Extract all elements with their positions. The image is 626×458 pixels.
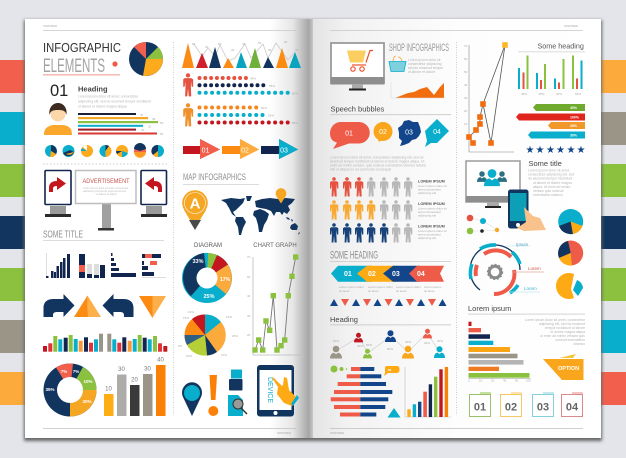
dot rows group 1: 45% (250, 76, 256, 80)
people labels: amet consectetur (418, 188, 441, 192)
line chart with orange markers: 50 (464, 70, 468, 74)
heading: speech bubbles (330, 104, 451, 115)
bars with percentages: 35 (140, 113, 144, 117)
multicolor bar row (43, 334, 167, 352)
text block (528, 168, 574, 197)
shop text block: Lorem ipsum dolor sit (408, 58, 440, 62)
heading: heading: Heading (330, 315, 358, 324)
stars: ★ (546, 145, 555, 156)
icon: navy curved arrow right (44, 294, 74, 317)
section 01 heading: ut labore et dolore magna aliqua (78, 104, 127, 108)
people labels: adipiscing elit (418, 214, 436, 218)
line chart with green markers: 20 (247, 333, 251, 337)
triangle peak chart: 40 (295, 48, 299, 52)
text block: Lorem ipsum dolor sit amet, (528, 168, 570, 172)
people labels: amet consectetur (418, 210, 441, 214)
arrow 01: 01 (202, 148, 209, 154)
text block: veniam quis nostrud (533, 189, 563, 193)
text block right aligned (525, 318, 586, 346)
pie chart: 5% (178, 344, 183, 348)
kiosk right (141, 170, 167, 217)
pie chart: 10% (188, 310, 194, 314)
donut chart: diagram: 17% (220, 277, 231, 283)
icon: navy curved arrow left (102, 294, 134, 317)
people network line chart: 30% (437, 339, 443, 343)
bubble 03: 03 (405, 130, 413, 136)
grouped bars: 30% (556, 92, 562, 96)
phone with hand (508, 190, 546, 231)
ring labels: Ipsum (516, 242, 529, 247)
pie chart: 15% (226, 315, 232, 319)
number box 02: 02 (505, 402, 517, 414)
line chart with orange markers: 30 (464, 96, 468, 100)
pie: teal (558, 209, 583, 234)
chevron captions: sit amet (424, 289, 435, 293)
people labels: LOREM IPSUM (418, 224, 445, 228)
heading: speech bubbles: Speech bubbles (330, 104, 385, 114)
ring diagram with gear (470, 245, 544, 294)
dot rows group 1: 55% (269, 84, 275, 88)
people labels: adipiscing elit (418, 191, 436, 195)
donut chart with percentages: 10% (83, 379, 93, 384)
dot rows group 2: 50% (261, 106, 267, 110)
horizontal bar chart: 0 (468, 378, 470, 382)
horizontal bar chart: 10 (479, 378, 483, 382)
people network line chart (330, 329, 445, 358)
icon: orange map pin on map (276, 188, 286, 204)
arrow bars: 30% (570, 134, 578, 138)
bubble 04: 04 (433, 129, 441, 136)
arrow 01 (183, 139, 220, 159)
people network line chart: 50% (366, 343, 372, 347)
text block: ut labore et dolore magna (533, 181, 572, 185)
donut chart with percentages: 30% (82, 399, 92, 404)
number box 03 (532, 393, 554, 416)
column chart with values: 20 (131, 378, 138, 384)
donut chart with percentages (44, 364, 96, 416)
text block right aligned: tempor incididunt ut labore (545, 326, 585, 330)
line chart with orange markers: 20 (464, 109, 468, 113)
line chart with orange markers: 70 (464, 44, 468, 48)
number box 01: 01 (474, 402, 486, 414)
people network line chart: 60% (333, 339, 339, 343)
line chart with green markers: 70 (247, 255, 251, 259)
bars with percentages: 30 (141, 128, 145, 132)
donut chart with percentages: 7% (61, 369, 67, 374)
chevron captions: sit amet (368, 289, 379, 293)
triangle peak chart: 60 (284, 40, 288, 44)
line chart with orange markers (464, 42, 514, 152)
chevron captions: sit amet (339, 289, 350, 293)
grouped bars (518, 56, 582, 96)
column chart with values: 40 (157, 358, 164, 364)
pie chart: 25% (232, 334, 238, 338)
triangle peak chart (182, 40, 301, 68)
section 01 heading (50, 82, 151, 108)
people row 1 (330, 177, 412, 196)
column chart with values: 30 (118, 367, 125, 373)
heading: lorem ipsum (468, 304, 585, 315)
arrow bars: 20% (570, 124, 578, 128)
section 01 heading: 01 (50, 82, 68, 100)
line chart with orange markers: 10 (464, 122, 468, 126)
billboard: advertisement: adipiscing elit sed do eiusmod tempor (83, 189, 127, 193)
monitor with people (466, 161, 520, 208)
small bar chart 1 (46, 253, 70, 278)
icon: orange inverted triangle (139, 296, 166, 318)
triangle peak chart: 50 (218, 42, 222, 46)
pie chart: 20% (186, 354, 192, 358)
arrow bars (516, 104, 585, 138)
stars: ★ (577, 145, 586, 156)
arrow 03 (261, 139, 298, 159)
icon: document with magnifier (228, 395, 247, 416)
paragraph: enim ad minim veniam, quis nostrud exercitation ullamco laboris (330, 164, 426, 168)
orange tag (384, 366, 400, 376)
billboard: advertisement: ut labore et dolore (96, 192, 117, 196)
heading: some title (43, 228, 164, 241)
option banner (543, 354, 584, 380)
paragraph: nisi ut aliquip ex ea commodo consequat (330, 168, 391, 172)
column chart with values: 10 (105, 386, 112, 392)
header and footer rules: INSPIRED (43, 24, 58, 28)
triangle row (330, 299, 446, 306)
people row 2 (330, 200, 412, 220)
header and footer rules (43, 24, 583, 435)
paragraph: Lorem ipsum dolor sit amet, consectetur adipiscing elit, sed do (330, 156, 424, 160)
chevron captions: sit amet (396, 289, 407, 293)
title: INFOGRAPHIC (43, 41, 121, 55)
people labels (418, 180, 447, 240)
section 01 heading: adipiscing elit, sed do eiusmod tempor incididunt (78, 100, 151, 104)
butterfly bars (331, 367, 392, 416)
donut chart with percentages: 7% (73, 369, 79, 374)
pie: title (129, 42, 163, 76)
dot rows group 2: 55% (268, 114, 274, 118)
header and footer rules: INSPIRED (330, 431, 345, 435)
text block: consectetur adipiscing elit, sed (528, 172, 574, 176)
icon: red figure (183, 73, 193, 96)
icon: tablet with hand (257, 365, 299, 416)
grouped bars: 35% (538, 92, 545, 96)
chevron band: 01 (344, 271, 352, 278)
heading: map infographics: MAP INFOGRAPHICS (183, 172, 246, 183)
heading: lorem ipsum: Lorem ipsum (468, 304, 511, 313)
triangle peak chart: 35 (268, 48, 272, 52)
stars: ★ (526, 145, 535, 156)
heading: heading (330, 315, 451, 325)
area chart (391, 82, 445, 98)
column chart with values: 30 (144, 366, 151, 372)
people network line chart: 30% (405, 340, 411, 344)
icon: tablet with hand: DEVICE (266, 377, 273, 403)
side stripes left (0, 60, 26, 405)
chevron captions: Lorem ipsum (424, 285, 442, 289)
icon: orange triangle (74, 296, 101, 317)
option banner: OPTION (558, 366, 579, 372)
heading: some title: SOME TITLE (43, 228, 83, 240)
dot rows group 2: 85% (292, 121, 298, 125)
text block: aliqua. Ut enim ad minim (533, 185, 570, 189)
people network line chart: 30% (357, 344, 363, 348)
horizontal bar chart: 100 (526, 378, 531, 382)
text block: exercitation ullamco (533, 193, 563, 197)
heading: some heading (518, 42, 585, 52)
pie: coral (558, 240, 583, 266)
row of small pies (45, 143, 164, 158)
shop text block (408, 58, 444, 74)
billboard: advertisement (76, 170, 136, 230)
chevron band (331, 266, 444, 282)
number box 01 (470, 393, 491, 416)
world map (221, 196, 300, 235)
triangle peak chart: 55 (258, 41, 262, 45)
text block right aligned: adipiscing elit, sed do eiusmod (539, 322, 585, 326)
dot rows group 2 (200, 106, 298, 125)
pie chart: 10% (221, 353, 227, 357)
ring labels: Lorem (528, 266, 541, 271)
grouped bars: 45% (521, 92, 527, 96)
header and footer rules: INSPIRED (564, 24, 579, 28)
line chart with orange markers: 60 (464, 57, 468, 61)
triangle peak chart: 30 (231, 48, 235, 52)
chevron captions: Lorem ipsum dolor (396, 285, 421, 289)
text block: do eiusmod tempor incididunt (528, 176, 572, 180)
column chart with values (104, 358, 166, 416)
small bar chart 4 (142, 254, 166, 278)
paragraph (330, 156, 426, 172)
header and footer rules: INSPIRED (277, 431, 292, 435)
billboard: advertisement: ADVERTISEMENT (82, 178, 130, 185)
line chart with green markers: 60 (247, 275, 251, 279)
number box 04 (562, 393, 583, 416)
people labels: Lorem ipsum dolor sit (418, 184, 447, 188)
stars: ★ (536, 145, 545, 156)
people labels: amet consectetur (418, 232, 441, 236)
shop text block: consectetur adipiscing (408, 62, 442, 66)
icon: location pin (182, 382, 202, 416)
chevron captions: Lorem ipsum dolor (368, 285, 393, 289)
heading: some title: Some title (528, 159, 562, 168)
shop text block: ut labore et dolore (408, 70, 435, 74)
ring labels (516, 242, 541, 291)
side stripes right (600, 60, 626, 405)
network diagram (467, 215, 499, 234)
grouped bars: 64% (575, 92, 581, 96)
text block right aligned: Lorem ipsum dolor sit amet, consectetur (525, 318, 586, 322)
bubble 01 (330, 122, 370, 149)
line chart with green markers: 40 (247, 294, 251, 298)
number box 03: 03 (537, 402, 549, 414)
donut chart with percentages: 35% (45, 387, 55, 392)
horizontal bar chart: 40 (503, 378, 507, 382)
teal triangle (388, 408, 400, 418)
rising bar chart (405, 367, 451, 417)
people labels: Lorem ipsum dolor sit (418, 206, 447, 210)
ring labels: Lorem (524, 286, 537, 291)
dots above butterfly bars (330, 366, 347, 372)
people labels: LOREM IPSUM (418, 180, 445, 184)
people labels: LOREM IPSUM (418, 202, 445, 206)
arrow 02 (222, 139, 259, 159)
stars (526, 145, 586, 156)
bubble 02: 02 (379, 129, 387, 136)
kiosk left (45, 170, 71, 217)
heading: chart graph: CHART GRAPH (253, 243, 297, 249)
donut chart: diagram: 25% (203, 294, 215, 300)
bars with percentages (78, 113, 164, 136)
title (43, 41, 121, 77)
line chart with green markers: 30 (247, 314, 251, 318)
line chart with green markers (247, 254, 300, 355)
bars with percentages: 45 (152, 117, 156, 121)
donut chart: diagram: 33% (192, 259, 204, 265)
horizontal bar chart (468, 322, 531, 382)
stars: ★ (556, 145, 565, 156)
arrow bars: 100% (570, 116, 580, 120)
horizontal bar chart: 20 (491, 378, 495, 382)
triangle peak chart: 45 (242, 42, 246, 46)
donut chart: diagram (182, 253, 232, 303)
dot rows group 1: 85% (292, 92, 298, 96)
pie: orange exploded (556, 273, 583, 299)
horizontal bar chart: 60 (515, 378, 519, 382)
small bar chart 3 (111, 253, 136, 277)
people row 3 (330, 223, 412, 242)
people network line chart: 80% (387, 347, 393, 351)
bubble 01: 01 (345, 130, 353, 138)
text block right aligned: nostrud exercitation (555, 338, 585, 342)
triangle peak chart: 40 (205, 45, 209, 49)
bars with percentages: 55 (160, 132, 164, 136)
icon: basket (389, 56, 406, 72)
small bar chart 2 (79, 254, 105, 278)
title: ELEMENTS (43, 56, 105, 77)
bubble 04 (425, 119, 449, 147)
chevron captions: Lorem ipsum dolor (339, 285, 364, 289)
pie chart (178, 310, 238, 358)
section 01 heading: Heading (78, 84, 108, 94)
dot rows group 1 (200, 76, 298, 96)
icon: orange figure (183, 103, 193, 126)
number box 02 (500, 393, 522, 416)
text block right aligned: ut enim ad minim veniam quis (540, 334, 585, 338)
stars: ★ (567, 145, 576, 156)
number box 04: 04 (566, 402, 579, 414)
icon: person (44, 103, 72, 135)
paragraph: eiusmod tempor incididunt ut labore et dolore magna aliqua. Ut (330, 160, 424, 164)
bubble 03 (398, 120, 421, 146)
icon: usb drive (229, 370, 242, 390)
heading: diagram: DIAGRAM (194, 243, 222, 249)
bars with percentages: 50 (160, 121, 164, 125)
arrow bars: 40% (570, 106, 578, 110)
chevron captions (339, 285, 442, 293)
text block right aligned: et dolore magna aliqua (550, 330, 585, 334)
icon: exclamation mark (208, 375, 218, 416)
people labels: adipiscing elit (418, 236, 436, 240)
icon: map pin A (182, 190, 208, 230)
billboard: advertisement: Lorem ipsum dolor sit amet consectetur (83, 186, 129, 190)
text block right aligned: ullamco (573, 342, 585, 346)
shop text block: sed do eiusmod tempor (408, 66, 444, 70)
bubble 02 (374, 122, 392, 142)
chevron band: 02 (368, 271, 376, 278)
monitor with shopping cart (330, 43, 384, 90)
heading: some heading (330, 250, 451, 262)
section 01 heading: Lorem ipsum dolor sit amet, consectetur (78, 94, 139, 98)
line chart with orange markers: 40 (464, 83, 468, 87)
chevron band: 04 (417, 271, 425, 278)
arrow 02: 02 (241, 148, 249, 154)
triangle peak chart: 60 (192, 42, 196, 46)
icon: map pin A: A (190, 196, 201, 212)
heading: shop infographics: SHOP INFOGRAPHICS (389, 42, 449, 54)
bars with percentages: 25 (148, 124, 152, 128)
people network line chart: 20% (424, 341, 430, 345)
pie chart: 15% (183, 316, 189, 320)
orange tag: 80 (388, 368, 392, 372)
chevron band: 03 (392, 271, 400, 278)
heading: some heading: Some heading (538, 42, 584, 50)
arrow 03: 03 (280, 148, 288, 154)
people labels: Lorem ipsum dolor sit (418, 229, 447, 233)
heading: some heading: SOME HEADING (330, 250, 378, 262)
